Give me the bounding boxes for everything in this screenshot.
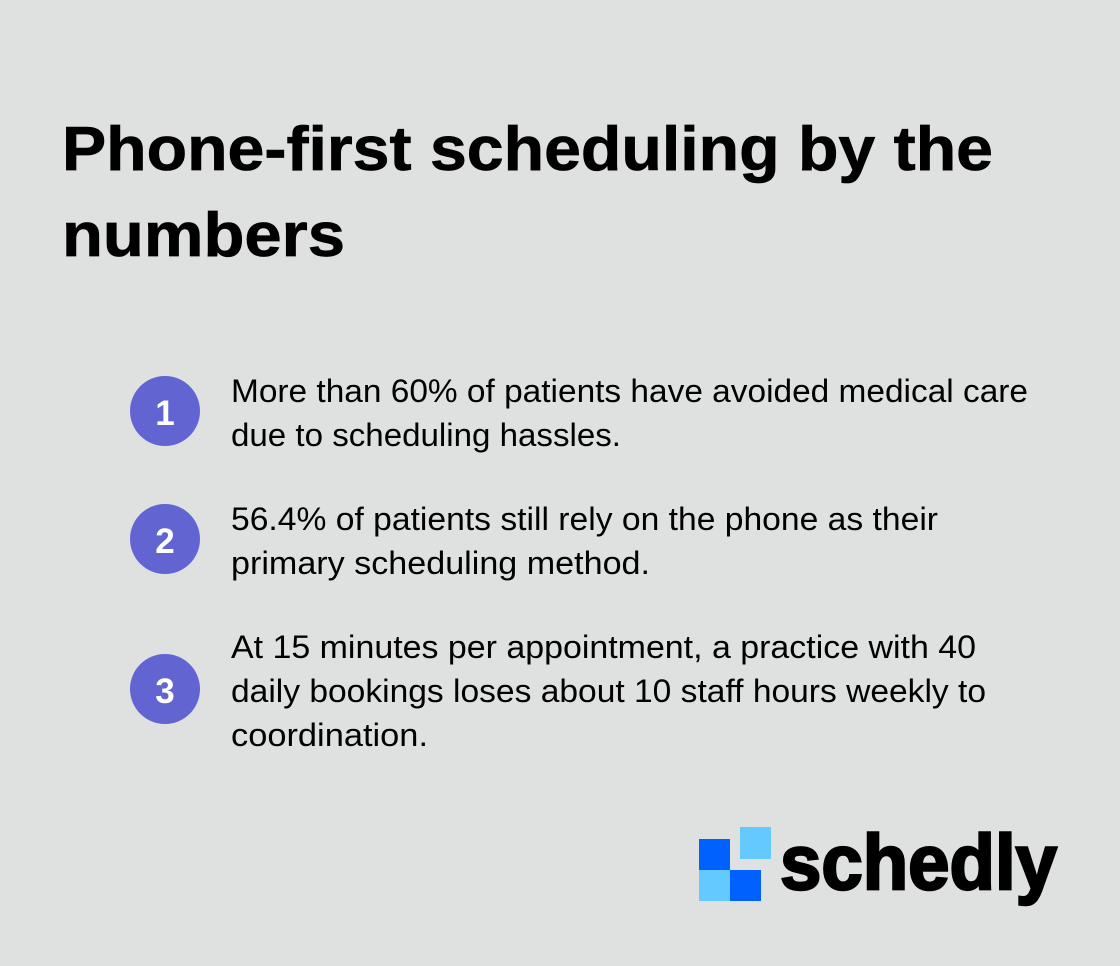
item 2 text: 56.4% of patients still rely on the phone as their <box>231 501 938 537</box>
number badge 2 <box>130 504 200 574</box>
item 3 text: At 15 minutes per appointment, a practice with 40 <box>231 629 976 665</box>
number badge 2: 2 <box>155 522 175 561</box>
item 3 text: coordination. <box>231 717 428 753</box>
list item 2 <box>130 501 938 581</box>
number badge 3 <box>130 654 200 724</box>
item 3 text <box>231 629 986 753</box>
title: Phone-first scheduling by the <box>62 115 993 184</box>
list item 1 <box>130 373 1028 453</box>
item 3 text: daily bookings loses about 10 staff hours weekly to <box>231 673 986 709</box>
item 2 text: primary scheduling method. <box>231 545 650 581</box>
logo: schedly <box>699 818 1057 906</box>
icon: logo squares <box>699 827 771 901</box>
item 2 text <box>231 501 938 581</box>
title <box>62 115 993 270</box>
item 1 text <box>231 373 1028 453</box>
number badge 1: 1 <box>155 394 175 433</box>
number badge 3: 3 <box>155 672 175 711</box>
logo wordmark: schedly <box>780 818 1057 906</box>
item 1 text: More than 60% of patients have avoided medical care <box>231 373 1028 409</box>
list item 3 <box>130 629 986 753</box>
number badge 1 <box>130 376 200 446</box>
title: numbers <box>62 201 345 270</box>
item 1 text: due to scheduling hassles. <box>231 417 621 453</box>
